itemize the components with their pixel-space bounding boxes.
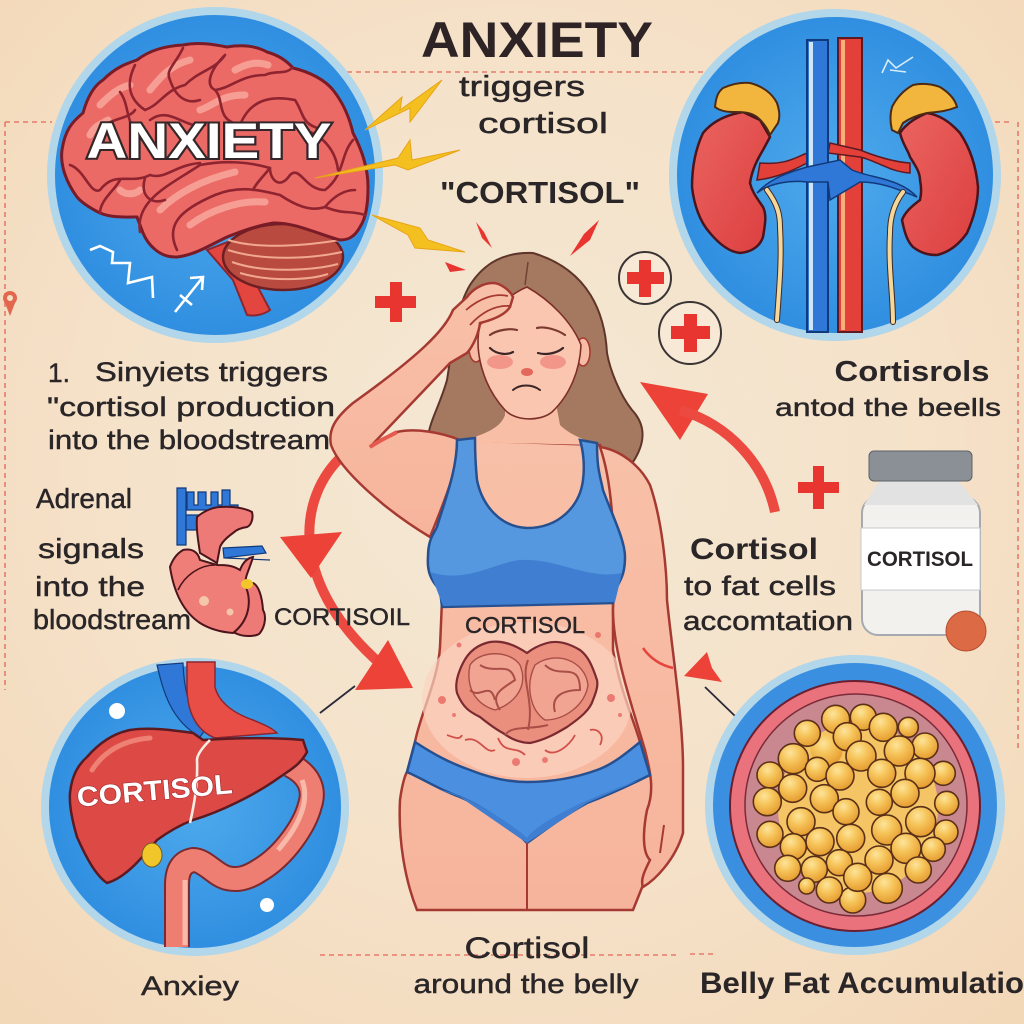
liver organ bbox=[70, 729, 307, 883]
red vessel bbox=[187, 662, 277, 738]
panel: brain bbox=[51, 11, 379, 339]
caption: belly fat accumulation: Belly Fat Accumulatio bbox=[700, 967, 1024, 1000]
text: adrenal signals: into the bbox=[35, 571, 145, 602]
arm raised and hand bbox=[330, 283, 513, 537]
brain highlights bbox=[90, 60, 268, 225]
adrenal right bbox=[890, 84, 957, 133]
text: cortisols note bbox=[775, 356, 1001, 422]
blue vein bbox=[807, 40, 828, 332]
caption: cortisol around belly: around the belly bbox=[414, 969, 639, 999]
red arrow: right curve bbox=[680, 410, 775, 512]
red specks bbox=[438, 632, 622, 766]
icon: location pin bbox=[3, 291, 17, 316]
text: adrenal signals bbox=[33, 483, 191, 635]
intestine tube bbox=[177, 765, 312, 947]
red arrow: circular arc bbox=[309, 458, 395, 676]
sports top bbox=[428, 438, 625, 607]
text: step 1 bbox=[47, 357, 335, 455]
small arrow to fat bbox=[684, 652, 722, 682]
text: cortisol to fat cells: Cortisol bbox=[690, 533, 818, 566]
renal artery bbox=[757, 143, 910, 180]
blue vessel bbox=[157, 663, 205, 737]
cerebellum bbox=[223, 224, 343, 290]
text: adrenal signals: bloodstream bbox=[33, 604, 191, 635]
torso and legs bbox=[400, 440, 655, 910]
icon: zigzag nerve signal bbox=[90, 246, 203, 312]
arrowheads bbox=[280, 382, 708, 690]
underwear bbox=[407, 742, 650, 843]
caption: cortisol around belly bbox=[414, 932, 639, 999]
caption: anxiety: Anxiey bbox=[141, 971, 240, 1001]
kidney right bbox=[900, 113, 978, 255]
panel: liver bbox=[45, 662, 345, 952]
ears bbox=[469, 334, 590, 366]
subtitle: triggers bbox=[459, 71, 585, 103]
text: adrenal signals: signals bbox=[38, 533, 144, 564]
text: cortisols note: Cortisrols bbox=[834, 356, 990, 388]
renal vein bbox=[757, 160, 917, 200]
stress marks bbox=[445, 220, 599, 272]
liver label: CORTISOL bbox=[76, 768, 234, 813]
text: adrenal signals: Adrenal bbox=[36, 483, 132, 514]
arm right bbox=[600, 447, 683, 887]
finger lines bbox=[466, 295, 510, 325]
brain label: ANXIETY bbox=[86, 113, 332, 169]
text: step 1: "cortisol production bbox=[47, 392, 335, 422]
woman figure bbox=[330, 253, 683, 910]
text: step 1: 1. bbox=[48, 358, 70, 388]
fat globules bbox=[753, 704, 959, 913]
lightning bolts bbox=[315, 80, 465, 252]
cortisol heading: "CORTISOL" bbox=[440, 175, 640, 210]
crosses bbox=[375, 252, 839, 509]
hair back bbox=[428, 253, 643, 462]
text: cortisol to fat cells bbox=[683, 533, 853, 636]
gallbladder bbox=[142, 843, 162, 867]
brain folds bbox=[70, 48, 365, 250]
title: ANXIETY bbox=[421, 12, 653, 68]
text: step 1: Sinyiets triggers bbox=[95, 357, 328, 387]
bottle bbox=[861, 451, 986, 651]
subtitle: cortisol bbox=[478, 108, 608, 140]
caption: cortisol around belly: Cortisol bbox=[464, 932, 590, 965]
face bbox=[478, 287, 581, 419]
organs in belly bbox=[447, 642, 602, 755]
panel: kidneys bbox=[673, 13, 997, 337]
kidney left bbox=[692, 112, 770, 253]
belly glow bbox=[422, 622, 632, 778]
neck bbox=[460, 398, 598, 445]
icon: heart bbox=[170, 488, 270, 636]
belly label: CORTISOL bbox=[465, 612, 585, 638]
label: cortisoil: CORTISOIL bbox=[274, 604, 410, 631]
text: cortisols note: antod the beells bbox=[775, 394, 1001, 422]
brain stem bbox=[207, 240, 270, 315]
adrenal left bbox=[715, 83, 779, 135]
hair part bbox=[525, 262, 528, 285]
face details bbox=[490, 327, 565, 390]
text: cortisol to fat cells: to fat cells bbox=[684, 571, 836, 601]
ureters bbox=[767, 190, 903, 322]
brain body bbox=[62, 44, 368, 257]
panel: fat cells bbox=[709, 659, 1001, 951]
text: cortisol to fat cells: accomtation bbox=[683, 606, 853, 636]
bottle label: CORTISOL bbox=[867, 548, 973, 571]
subtitle bbox=[459, 71, 608, 140]
inner fat mass bbox=[778, 723, 938, 893]
red artery bbox=[838, 38, 862, 332]
text: step 1: into the bloodstream bbox=[48, 425, 330, 455]
